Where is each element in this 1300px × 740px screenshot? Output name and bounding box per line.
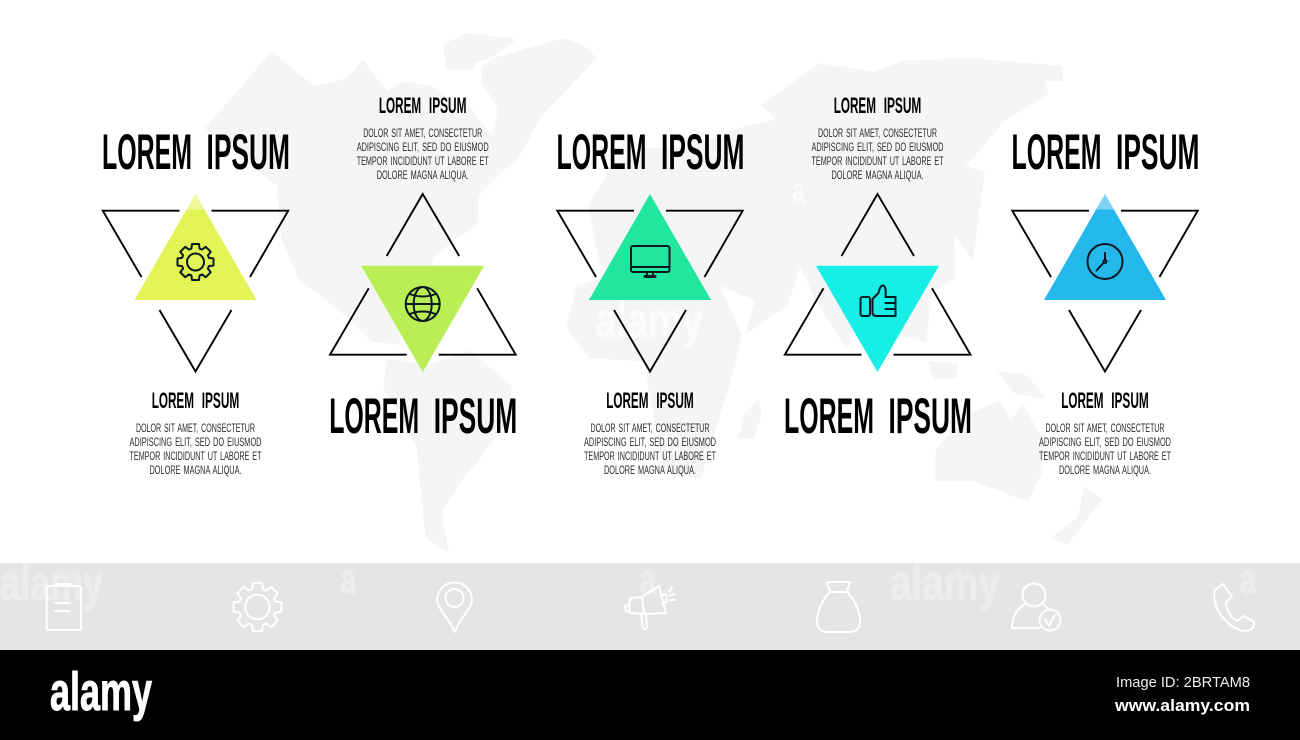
triangle outline: [785, 194, 970, 355]
colored triangle: [816, 266, 939, 372]
body text: [812, 128, 944, 182]
subheading: LOREM: [152, 388, 194, 413]
heading: IPSUM: [661, 124, 744, 180]
website: www.alamy.com: [1114, 696, 1250, 715]
icon: gear outline: [234, 583, 281, 631]
body text: [130, 423, 262, 477]
body text: TEMPOR INCIDIDUNT UT LABORE ET: [357, 156, 489, 168]
body text: DOLOR SIT AMET, CONSECTETUR: [363, 128, 482, 140]
map watermarks: alamy: [595, 292, 703, 350]
body text: DOLORE MAGNA ALIQUA.: [832, 170, 924, 182]
map watermarks: a: [792, 170, 806, 211]
subheading: LOREM: [1061, 388, 1103, 413]
colored triangle: [1044, 194, 1166, 300]
column 4: thumbs up: [784, 93, 972, 444]
body text: DOLORE MAGNA ALIQUA.: [377, 170, 469, 182]
body text: ADIPISCING ELIT, SED DO EIUSMOD: [130, 437, 262, 449]
heading: LOREM: [329, 388, 419, 444]
logo: alamy: alamy: [50, 662, 152, 722]
triangle tip highlight: [186, 194, 204, 210]
icon: map pin: [437, 582, 472, 632]
body text: TEMPOR INCIDIDUNT UT LABORE ET: [812, 156, 944, 168]
map watermarks: [595, 170, 806, 350]
body text: DOLOR SIT AMET, CONSECTETUR: [1046, 423, 1164, 435]
footer bar: [0, 650, 1300, 740]
body text: ADIPISCING ELIT, SED DO EIUSMOD: [357, 142, 489, 154]
body text: DOLORE MAGNA ALIQUA.: [604, 465, 696, 477]
icon: thumbs up: [860, 285, 896, 316]
body text: [1039, 423, 1171, 477]
heading: IPSUM: [206, 124, 290, 180]
icon: money sack: [817, 582, 860, 632]
icon: megaphone: [625, 586, 675, 629]
colored triangle: [134, 194, 256, 300]
band watermarks: alamy: [0, 555, 103, 611]
icon: clipboard: [47, 584, 81, 630]
body text: DOLOR SIT AMET, CONSECTETUR: [818, 128, 937, 140]
subheading: LOREM: [379, 93, 421, 118]
icon: gear: [178, 244, 214, 280]
subheading: IPSUM: [429, 93, 467, 118]
triangle outline: [103, 211, 288, 372]
column 5: clock: [1012, 124, 1200, 477]
colored triangle: [361, 266, 484, 372]
body text: DOLORE MAGNA ALIQUA.: [1059, 465, 1151, 477]
column 2: globe: [329, 93, 517, 444]
body text: [357, 128, 489, 182]
band watermarks: a: [1240, 555, 1256, 604]
column 1: gear: [102, 124, 290, 477]
heading: LOREM: [784, 388, 874, 444]
band watermarks: a: [340, 555, 356, 604]
body text: TEMPOR INCIDIDUNT UT LABORE ET: [584, 451, 716, 463]
band watermarks: [0, 555, 1256, 611]
heading: LOREM: [556, 124, 646, 180]
body text: TEMPOR INCIDIDUNT UT LABORE ET: [1039, 451, 1171, 463]
triangle outline: [1012, 211, 1198, 372]
icon: monitor: [631, 246, 670, 276]
icon: globe: [406, 287, 440, 321]
body text: [584, 423, 716, 477]
background world map: [207, 35, 1100, 550]
heading: LOREM: [1012, 124, 1102, 180]
icon: clock: [1088, 244, 1122, 279]
column 3: monitor: [556, 124, 744, 477]
subheading: IPSUM: [656, 388, 694, 413]
body text: ADIPISCING ELIT, SED DO EIUSMOD: [584, 437, 716, 449]
heading: LOREM: [102, 124, 192, 180]
image id: Image ID: 2BRTAM8: [1116, 674, 1250, 691]
subheading: IPSUM: [1111, 388, 1149, 413]
body text: DOLORE MAGNA ALIQUA.: [150, 465, 242, 477]
panel: gray icon band: [0, 555, 1300, 650]
body text: DOLOR SIT AMET, CONSECTETUR: [136, 423, 255, 435]
subheading: IPSUM: [884, 93, 921, 118]
body text: DOLOR SIT AMET, CONSECTETUR: [590, 423, 710, 435]
subheading: LOREM: [606, 388, 648, 413]
body text: TEMPOR INCIDIDUNT UT LABORE ET: [130, 451, 262, 463]
triangle outline: [557, 211, 743, 372]
triangle outline: [330, 194, 516, 355]
subheading: IPSUM: [202, 388, 239, 413]
body text: ADIPISCING ELIT, SED DO EIUSMOD: [812, 142, 944, 154]
band watermarks: alamy: [890, 555, 1000, 611]
heading: IPSUM: [888, 388, 972, 444]
icon: phone: [1214, 584, 1254, 631]
colored triangle: [589, 194, 711, 300]
triangle tip highlight: [1096, 194, 1114, 210]
body text: ADIPISCING ELIT, SED DO EIUSMOD: [1039, 437, 1171, 449]
heading: IPSUM: [1116, 124, 1200, 180]
icon: user check: [1012, 584, 1060, 630]
band watermarks: a: [640, 555, 656, 604]
heading: IPSUM: [434, 388, 517, 444]
subheading: LOREM: [834, 93, 876, 118]
